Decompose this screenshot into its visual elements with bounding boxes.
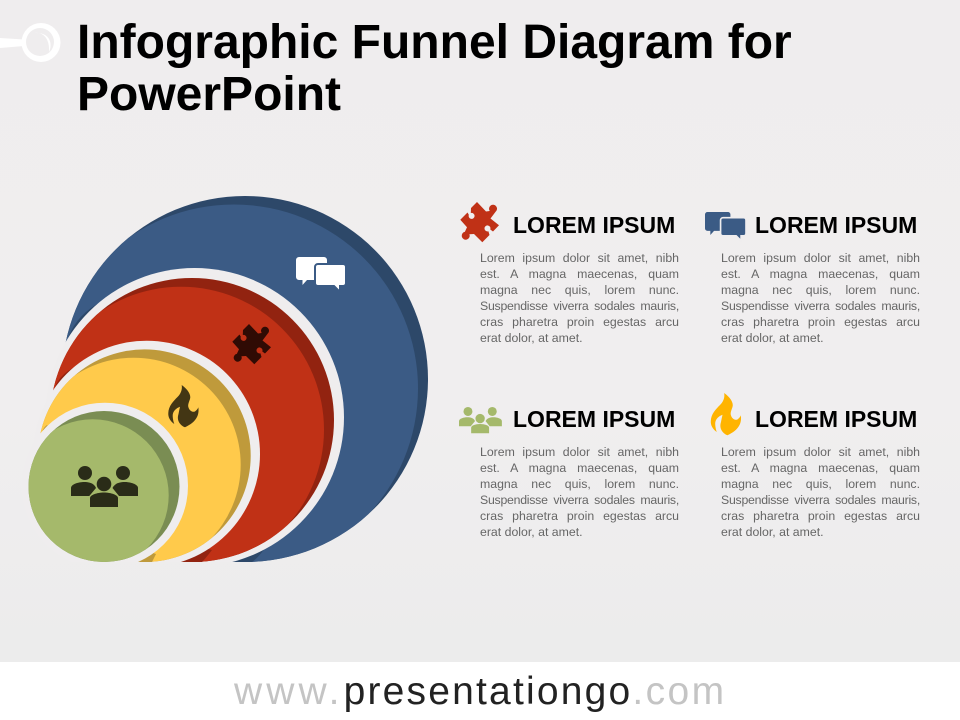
icon: flame on yellow layer	[168, 385, 199, 427]
text: bottom left	[480, 445, 679, 539]
text: bottom right: magna nec quis, lorem nunc.	[721, 477, 920, 491]
text: top right	[721, 251, 920, 345]
funnel layer: green	[28, 411, 180, 562]
text: top right: erat dolor, at amet.	[721, 331, 824, 345]
text: bottom left: erat dolor, at amet.	[480, 525, 583, 539]
diagram and icons	[0, 23, 746, 562]
gap ring around green	[38, 402, 188, 562]
funnel layer: blue	[50, 196, 428, 572]
funnel diagram	[17, 196, 428, 573]
gap ring around red	[45, 268, 344, 567]
text: bottom right: Lorem ipsum dolor sit amet, nibh	[721, 445, 920, 459]
icon: people on green layer	[71, 466, 138, 507]
text: bottom right: erat dolor, at amet.	[721, 525, 824, 539]
title	[77, 16, 792, 121]
text: top right: magna nec quis, lorem nunc.	[721, 283, 920, 297]
footer website text: www.presentationgo.com	[234, 670, 727, 713]
text: bottom right: Suspendisse viverra sodales mauris,	[721, 493, 920, 507]
heading: top right: LOREM IPSUM	[755, 212, 917, 238]
funnel layer: yellow	[27, 349, 251, 572]
text: bottom right: cras pharetra proin egestas arcu	[721, 509, 920, 523]
pin ornament	[0, 23, 60, 62]
text: top right: Suspendisse viverra sodales mauris,	[721, 299, 920, 313]
text: bottom left: magna nec quis, lorem nunc.	[480, 477, 679, 491]
text: bottom left: est. A magna maecenas, quam	[480, 461, 679, 475]
text: top left: erat dolor, at amet.	[480, 331, 583, 345]
title: PowerPoint	[77, 68, 341, 121]
footer band	[0, 662, 960, 720]
text: top right: cras pharetra proin egestas arcu	[721, 315, 920, 329]
text: bottom left: Lorem ipsum dolor sit amet, nibh	[480, 445, 679, 459]
text: bottom left: cras pharetra proin egestas arcu	[480, 509, 679, 523]
text: top right: Lorem ipsum dolor sit amet, nibh	[721, 251, 920, 265]
icon: flame, yellow	[711, 393, 741, 435]
text: bottom right: est. A magna maecenas, quam	[721, 461, 920, 475]
text: top left: Suspendisse viverra sodales mauris,	[480, 299, 679, 313]
title: Infographic Funnel Diagram for	[77, 16, 792, 69]
icon: chat on blue layer	[296, 257, 346, 292]
text: top left: cras pharetra proin egestas arcu	[480, 315, 679, 329]
icon: puzzle, red	[460, 202, 499, 242]
text: top left	[480, 251, 679, 345]
gap ring around yellow	[33, 341, 260, 567]
heading: top left: LOREM IPSUM	[513, 212, 675, 238]
icon: puzzle on red layer	[232, 324, 271, 364]
text: top left: est. A magna maecenas, quam	[480, 267, 679, 281]
icon: people, green	[459, 407, 502, 433]
icon: chat, blue	[705, 212, 746, 241]
text: top left: magna nec quis, lorem nunc.	[480, 283, 679, 297]
text: top right: est. A magna maecenas, quam	[721, 267, 920, 281]
heading: bottom left: LOREM IPSUM	[513, 406, 675, 432]
heading: bottom right: LOREM IPSUM	[755, 406, 917, 432]
funnel layer: red	[38, 278, 334, 573]
text: bottom left: Suspendisse viverra sodales mauris,	[480, 493, 679, 507]
text: top left: Lorem ipsum dolor sit amet, nibh	[480, 251, 679, 265]
text: bottom right	[721, 445, 920, 539]
